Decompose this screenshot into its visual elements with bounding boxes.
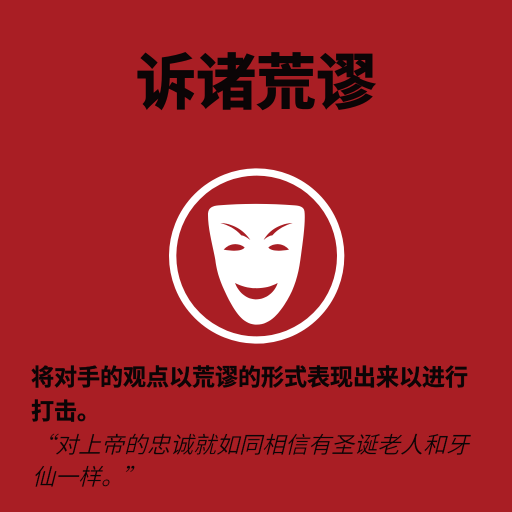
example quote: “对上帝的忠诚就如同相信有圣诞老人和牙 <box>32 426 469 460</box>
right eyebrow <box>264 223 293 240</box>
mask face <box>208 204 305 325</box>
icon ring <box>173 172 341 340</box>
description text continued: 打击。 <box>31 398 100 424</box>
right eye <box>268 244 289 251</box>
mouth <box>235 283 278 299</box>
left eyebrow <box>220 223 250 240</box>
description text: 将对手的观点以荒谬的形式表现出来以进行 <box>31 364 468 390</box>
left eye <box>224 244 245 251</box>
example quote continued: 仙一样。 ” <box>32 458 144 492</box>
title: 诉诸荒谬 <box>136 50 376 117</box>
